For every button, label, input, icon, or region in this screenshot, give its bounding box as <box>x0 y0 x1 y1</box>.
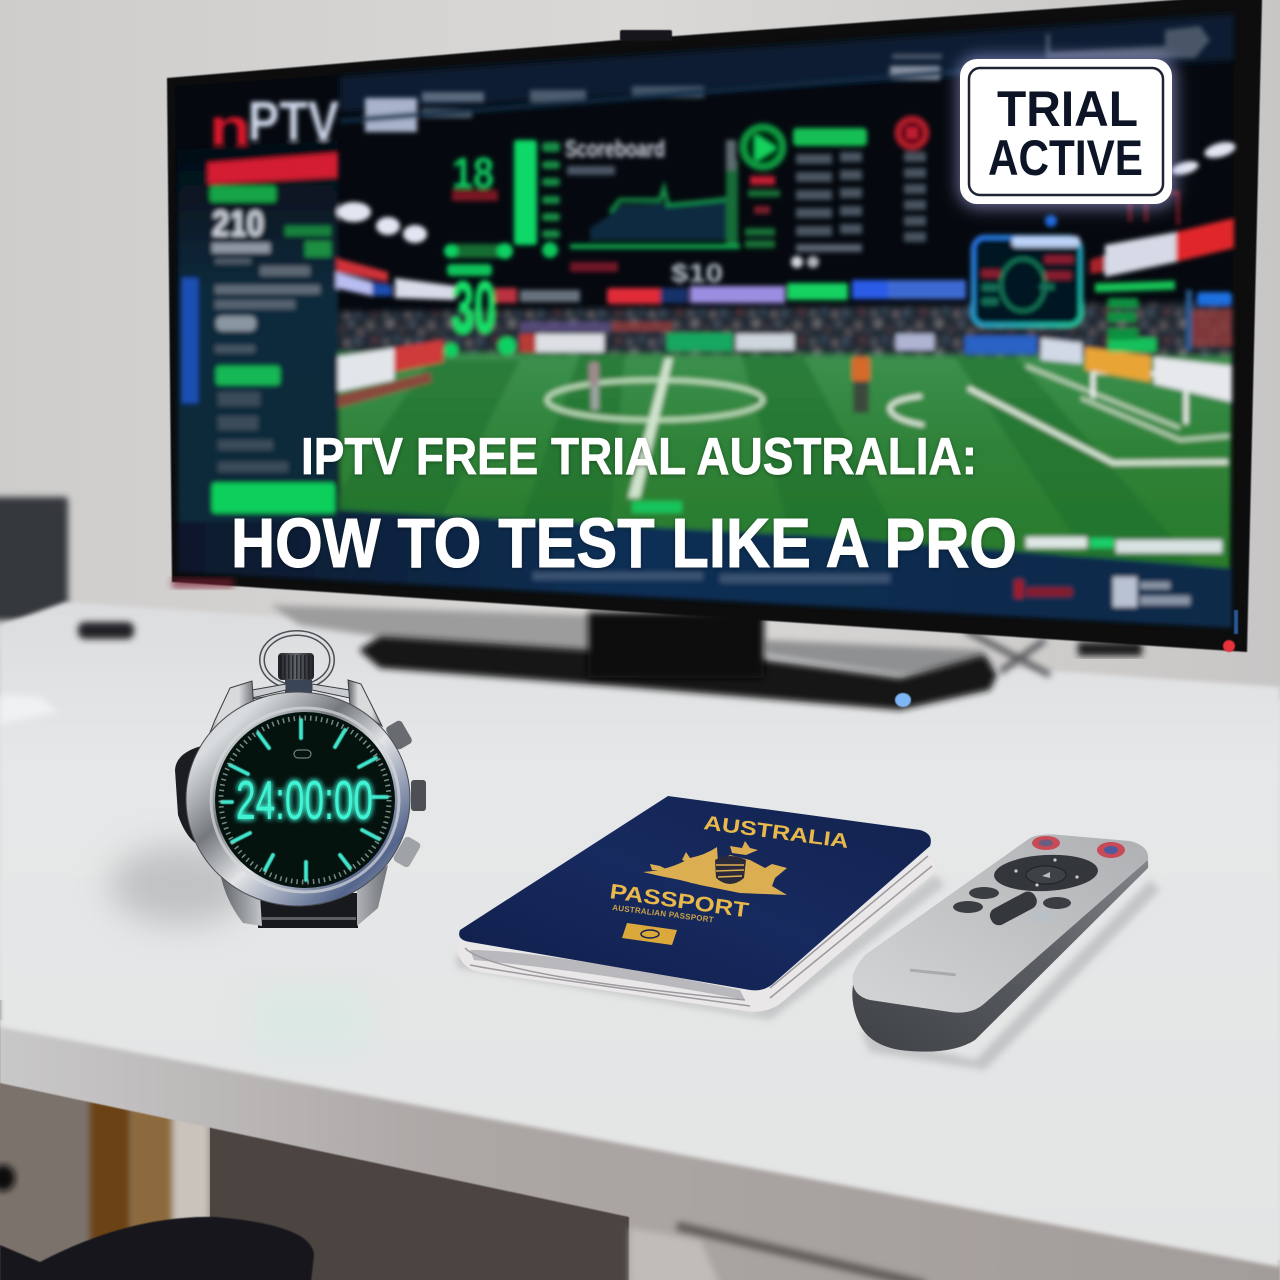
trial active badge: TRIAL <box>997 81 1138 137</box>
blue hud panel <box>973 215 1081 325</box>
lower navy band <box>178 510 1232 628</box>
biometric chip <box>622 923 677 945</box>
red record icon and column <box>898 119 926 242</box>
stadium floodlights <box>337 139 1237 243</box>
coat of arms <box>643 841 787 895</box>
scoreboard chart <box>565 136 740 288</box>
chair <box>0 1217 314 1280</box>
scoreboard chart: Scoreboard <box>565 136 665 163</box>
trial active badge <box>958 56 1176 208</box>
lugs <box>203 681 254 750</box>
watch shadow <box>110 845 250 925</box>
green stats bar with dots <box>514 140 560 258</box>
tv screen <box>175 14 1237 628</box>
play icon on screen <box>743 127 783 248</box>
tv frame <box>167 0 1262 652</box>
blurred screen contents <box>178 26 1237 628</box>
logo on screen: PTV <box>248 89 339 152</box>
mid-screen ticker row <box>520 256 966 304</box>
passport <box>457 796 935 1012</box>
screen base <box>175 14 1234 628</box>
dial <box>215 712 395 888</box>
left stats panel: 210 <box>212 203 264 244</box>
pages <box>457 852 935 1012</box>
desk reflection <box>250 985 370 1055</box>
crowd <box>338 302 1232 356</box>
title <box>231 428 1017 582</box>
small dial icon <box>294 750 311 758</box>
screen top band <box>340 14 1234 112</box>
scoreboard chart: $10 <box>671 258 723 288</box>
title line two: HOW TO TEST LIKE A PRO <box>231 504 1017 582</box>
top menu text <box>340 26 1210 132</box>
desk front face and cabinet <box>0 1020 1280 1280</box>
title line one: IPTV FREE TRIAL AUSTRALIA: <box>301 428 977 486</box>
desk top <box>0 602 1280 1267</box>
remote control <box>852 834 1148 1052</box>
under-desk area <box>0 1000 640 1280</box>
logo on screen: n <box>209 99 251 157</box>
green header and data columns <box>793 128 867 252</box>
green score numbers: 18 <box>452 149 494 198</box>
cover <box>459 796 931 990</box>
dial ticks <box>222 720 387 880</box>
passport heading: AUSTRALIA <box>702 812 850 853</box>
background speaker <box>0 497 68 652</box>
ring <box>262 633 332 687</box>
remote body underside <box>852 845 1148 1052</box>
background wall <box>0 0 1280 700</box>
crossbar <box>252 684 350 699</box>
tv webcam <box>620 30 672 41</box>
passport shadow <box>455 875 945 1020</box>
digital time: 24:00:00 <box>236 769 373 831</box>
red buttons <box>1032 836 1125 858</box>
tv stand <box>270 605 1142 710</box>
desk clutter left <box>0 622 134 724</box>
brand mark <box>910 969 956 976</box>
bezel <box>186 692 410 906</box>
remote top face <box>853 834 1148 1013</box>
left broadcast banner <box>336 258 455 300</box>
logo on screen <box>209 89 339 157</box>
trial active badge: ACTIVE <box>988 130 1143 186</box>
stopwatch <box>175 633 426 928</box>
strap <box>175 745 215 850</box>
pitch advertising boards <box>336 333 1232 408</box>
remote shadow <box>860 880 1160 1070</box>
left stats panel <box>178 140 338 522</box>
green score numbers: 30 <box>452 268 496 348</box>
green score numbers <box>444 149 517 357</box>
side pushers <box>385 719 426 869</box>
right broadcast banners <box>1090 192 1234 350</box>
crown <box>278 653 314 694</box>
small buttons <box>953 887 1071 928</box>
tv status lights <box>172 578 1238 652</box>
d-pad <box>993 852 1099 894</box>
passport word: PASSPORT <box>608 880 750 922</box>
football pitch <box>320 345 1232 575</box>
bottom screen marks <box>1015 577 1190 607</box>
passport small text: AUSTRALIAN PASSPORT <box>612 903 714 924</box>
